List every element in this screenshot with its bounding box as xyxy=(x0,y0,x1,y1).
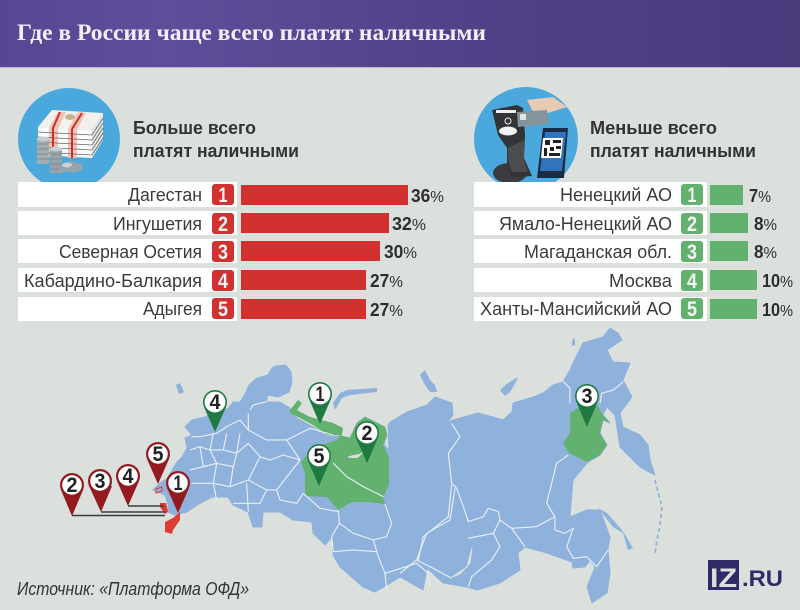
row 3: 3 xyxy=(687,241,697,264)
pin red 1: 1 xyxy=(174,472,183,495)
row 5: 5 xyxy=(687,298,697,321)
pin red 5: 5 xyxy=(152,443,164,466)
green regions xyxy=(290,400,610,510)
row 2: 32% xyxy=(392,214,426,234)
pin red 3 xyxy=(88,469,112,512)
row 1: 36% xyxy=(411,186,444,206)
row 1 xyxy=(474,182,771,207)
heading: most cash: Больше всего xyxy=(133,118,256,138)
pin green 3: 3 xyxy=(582,385,592,408)
pin green 4: 4 xyxy=(210,391,221,414)
row 5: Ханты-Мансийский АО xyxy=(480,299,672,319)
pin green 2: 2 xyxy=(362,422,372,445)
row 2: 2 xyxy=(218,213,228,236)
row 4: Москва xyxy=(609,271,673,291)
icon: payment terminal, card and phone xyxy=(474,87,578,191)
panel: most cash ranking xyxy=(18,182,444,321)
row 3 xyxy=(474,239,777,264)
pin green 3 xyxy=(575,384,599,427)
pin green 5: 5 xyxy=(314,445,325,468)
row 4 xyxy=(18,268,403,293)
pin red 2 xyxy=(60,473,84,516)
logo: iz.ru: .RU xyxy=(742,566,783,591)
pin green 5 xyxy=(307,444,331,486)
pin green 1: 1 xyxy=(316,383,325,406)
heading: least cash xyxy=(590,118,756,161)
row 3: 30% xyxy=(384,242,417,262)
map of Russia xyxy=(72,328,662,603)
row 4: 27% xyxy=(370,271,403,291)
row 4: 10% xyxy=(762,271,793,291)
pin red 2: 2 xyxy=(66,474,78,497)
pin green 4 xyxy=(203,390,227,432)
row 2: 2 xyxy=(687,213,697,236)
heading: most cash xyxy=(133,118,299,161)
logo: iz.ru: IZ xyxy=(710,563,737,593)
row 5: 5 xyxy=(218,298,228,321)
row 4: Кабардино-Балкария xyxy=(24,271,202,291)
row 5: 27% xyxy=(370,300,403,320)
pin red 1 xyxy=(166,471,190,513)
map pins xyxy=(60,382,599,516)
row 1 xyxy=(18,182,444,207)
row 5 xyxy=(18,297,403,321)
row 5: 10% xyxy=(762,300,793,320)
row 3: Магаданская обл. xyxy=(524,242,672,262)
red regions xyxy=(156,487,180,534)
panel: least cash ranking xyxy=(474,182,793,321)
pin red 5 xyxy=(146,442,170,484)
white region borders xyxy=(190,382,623,590)
icon: cash stacks and coins xyxy=(18,88,120,190)
row 1: Дагестан xyxy=(128,185,202,205)
row 4 xyxy=(474,268,793,293)
heading: least cash: Меньше всего xyxy=(590,118,717,138)
row 2: Ямало-Ненецкий АО xyxy=(499,214,672,234)
header banner xyxy=(0,0,800,68)
islands xyxy=(176,338,662,554)
source note: Источник: «Платформа ОФД» xyxy=(17,579,249,599)
row 2 xyxy=(18,211,426,236)
pin red 4: 4 xyxy=(122,465,134,488)
row 2: 8% xyxy=(754,214,777,234)
heading: least cash: платят наличными xyxy=(590,141,756,161)
row 5: Адыгея xyxy=(143,299,202,319)
row 2: Ингушетия xyxy=(113,214,202,234)
row 3: 3 xyxy=(218,241,228,264)
row 1: 1 xyxy=(218,184,228,207)
row 3: Северная Осетия xyxy=(59,242,202,262)
row 3 xyxy=(18,239,417,264)
row 4: 4 xyxy=(218,270,228,293)
row 1: 1 xyxy=(688,184,697,207)
leader lines xyxy=(72,506,165,516)
row 4: 4 xyxy=(687,270,697,293)
pin green 1 xyxy=(308,382,332,424)
row 2 xyxy=(474,211,777,236)
row 1: Ненецкий АО xyxy=(560,185,672,205)
title: Где в России чаще всего платят наличными xyxy=(17,20,486,45)
row 3: 8% xyxy=(754,242,777,262)
pin red 3: 3 xyxy=(94,470,106,493)
pin red 4 xyxy=(116,464,140,506)
logo: iz.ru xyxy=(708,560,783,593)
row 5 xyxy=(474,297,793,321)
pin green 2 xyxy=(355,421,379,463)
heading: most cash: платят наличными xyxy=(133,141,299,161)
row 1: 7% xyxy=(749,186,771,206)
